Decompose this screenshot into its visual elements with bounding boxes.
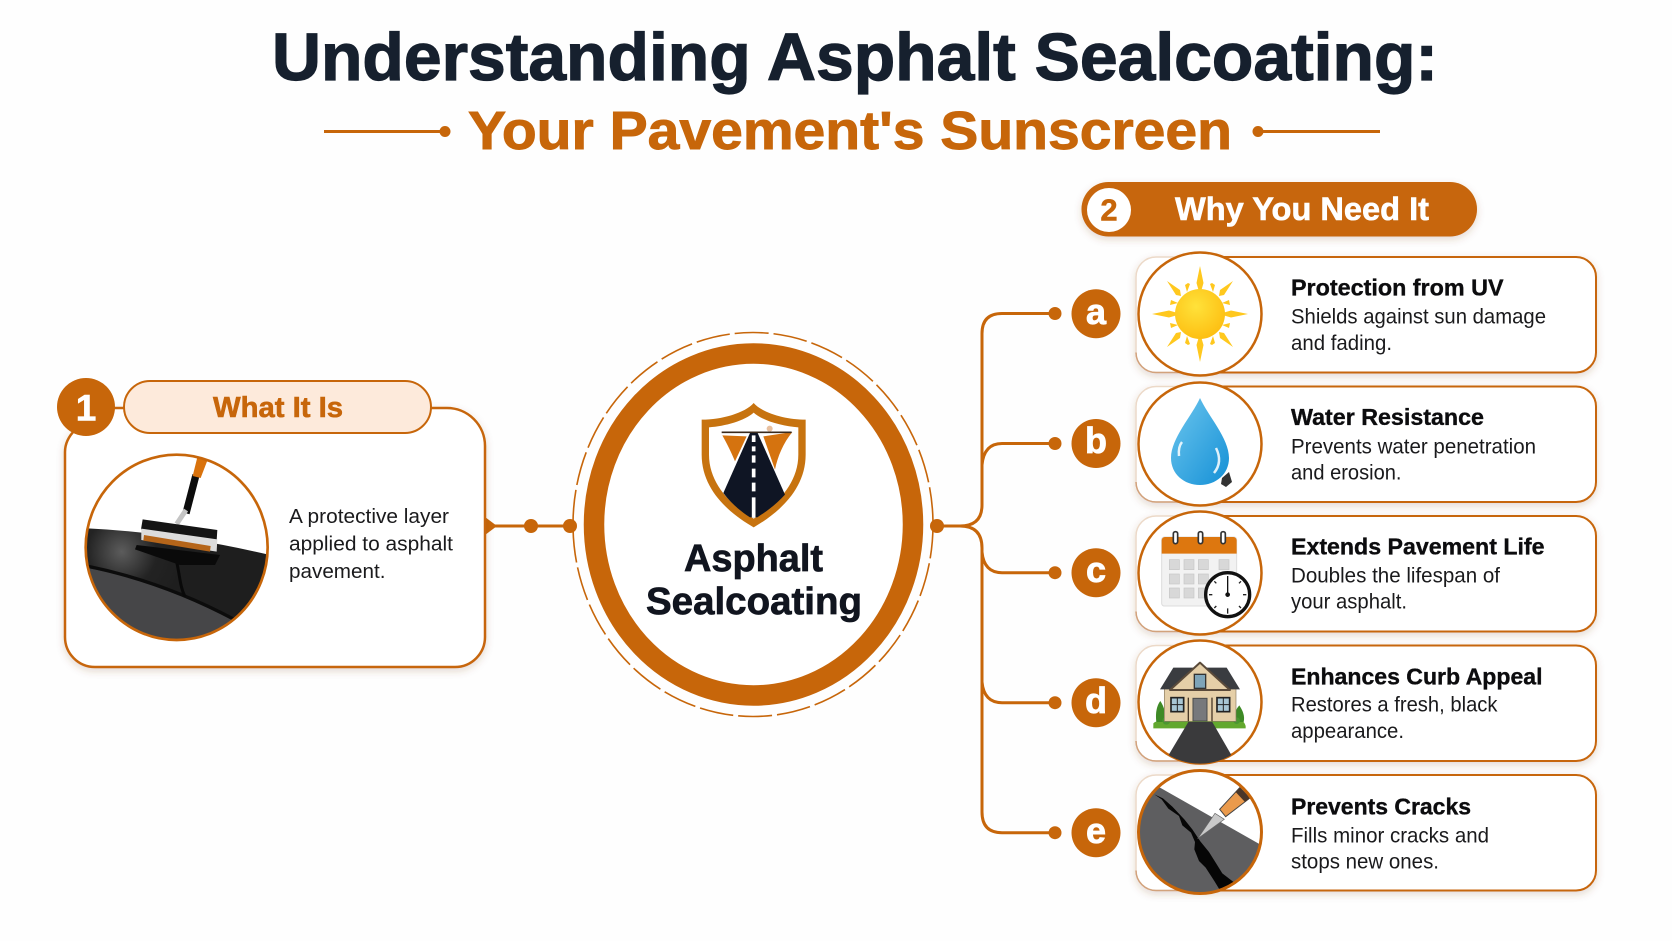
card e <box>1136 775 1596 890</box>
central hub <box>573 332 933 716</box>
description text: A protective layer <box>289 505 449 528</box>
hub label: Sealcoating <box>646 581 862 623</box>
card e text: stops new ones. <box>1291 849 1439 873</box>
card d <box>1136 646 1596 761</box>
card c text: Doubles the lifespan of <box>1291 563 1500 587</box>
heading pill: what it is: What It Is <box>213 392 343 424</box>
panel: what it is <box>57 378 485 667</box>
hub label <box>646 538 862 623</box>
benefit c: extends pavement life <box>1072 512 1596 634</box>
connector: panel to hub <box>485 517 577 535</box>
card b text: Prevents water penetration <box>1291 434 1536 458</box>
number badge 1: 1 <box>76 388 96 428</box>
subtitle with side rules <box>324 101 1380 161</box>
description text: applied to asphalt <box>289 532 453 556</box>
benefit a: protection from UV <box>1072 252 1596 376</box>
icon: water drop <box>1138 382 1262 506</box>
card b <box>1136 386 1596 502</box>
title: Understanding Asphalt Sealcoating: <box>272 20 1438 95</box>
benefit b: water resistance <box>1072 382 1596 506</box>
card d text: Enhances Curb Appeal <box>1291 663 1542 689</box>
card c text <box>1291 533 1544 614</box>
card d text <box>1291 663 1542 743</box>
letter badge c <box>1072 548 1120 597</box>
card a text: Shields against sun damage <box>1291 304 1546 328</box>
card c text: your asphalt. <box>1291 590 1407 614</box>
letter badge c: c <box>1086 549 1106 590</box>
benefit e: prevents cracks <box>1072 770 1596 899</box>
connector tree: hub to benefits <box>930 307 1062 839</box>
icon: sun <box>1138 252 1262 376</box>
card e text: Fills minor cracks and <box>1291 823 1489 847</box>
card b text: and erosion. <box>1291 460 1402 484</box>
panel frame <box>65 408 485 667</box>
card a text: and fading. <box>1291 331 1392 355</box>
card c <box>1136 516 1596 632</box>
card b text <box>1291 404 1536 484</box>
card d text: Restores a fresh, black <box>1291 693 1498 717</box>
card e text: Prevents Cracks <box>1291 793 1471 819</box>
letter badge a <box>1072 289 1120 338</box>
letter badge e <box>1072 808 1120 857</box>
hub label: Asphalt <box>684 538 823 580</box>
letter badge e: e <box>1086 810 1106 851</box>
letter badge d: d <box>1085 680 1107 721</box>
section heading: why you need it: Why You Need It <box>1175 191 1429 227</box>
card b text: Water Resistance <box>1291 404 1484 430</box>
dashed outer ring <box>573 332 933 716</box>
section heading: why you need it <box>1082 182 1477 236</box>
card a <box>1136 257 1596 372</box>
icon: shield with road <box>702 403 806 527</box>
thick ring <box>594 354 913 696</box>
icon: crack filler <box>1135 770 1268 899</box>
card a text <box>1291 275 1546 355</box>
card d text: appearance. <box>1291 719 1404 743</box>
letter badge d <box>1072 678 1120 727</box>
letter badge b <box>1072 419 1120 468</box>
description text: pavement. <box>289 560 386 583</box>
number badge 1 <box>57 378 115 436</box>
icon: calendar and clock <box>1138 512 1262 634</box>
card a text: Protection from UV <box>1291 275 1504 301</box>
letter badge a: a <box>1086 291 1107 332</box>
benefit d: enhances curb appeal <box>1072 640 1596 769</box>
description text <box>289 505 453 583</box>
card c text: Extends Pavement Life <box>1291 533 1544 559</box>
subtitle with side rules: Your Pavement's Sunscreen <box>468 101 1232 161</box>
icon: roller applying sealant <box>84 453 269 642</box>
section heading: why you need it: 2 <box>1100 192 1118 228</box>
card e text <box>1291 793 1489 873</box>
letter badge b: b <box>1085 420 1107 461</box>
icon: house with driveway <box>1138 640 1262 769</box>
heading pill: what it is <box>124 381 431 433</box>
